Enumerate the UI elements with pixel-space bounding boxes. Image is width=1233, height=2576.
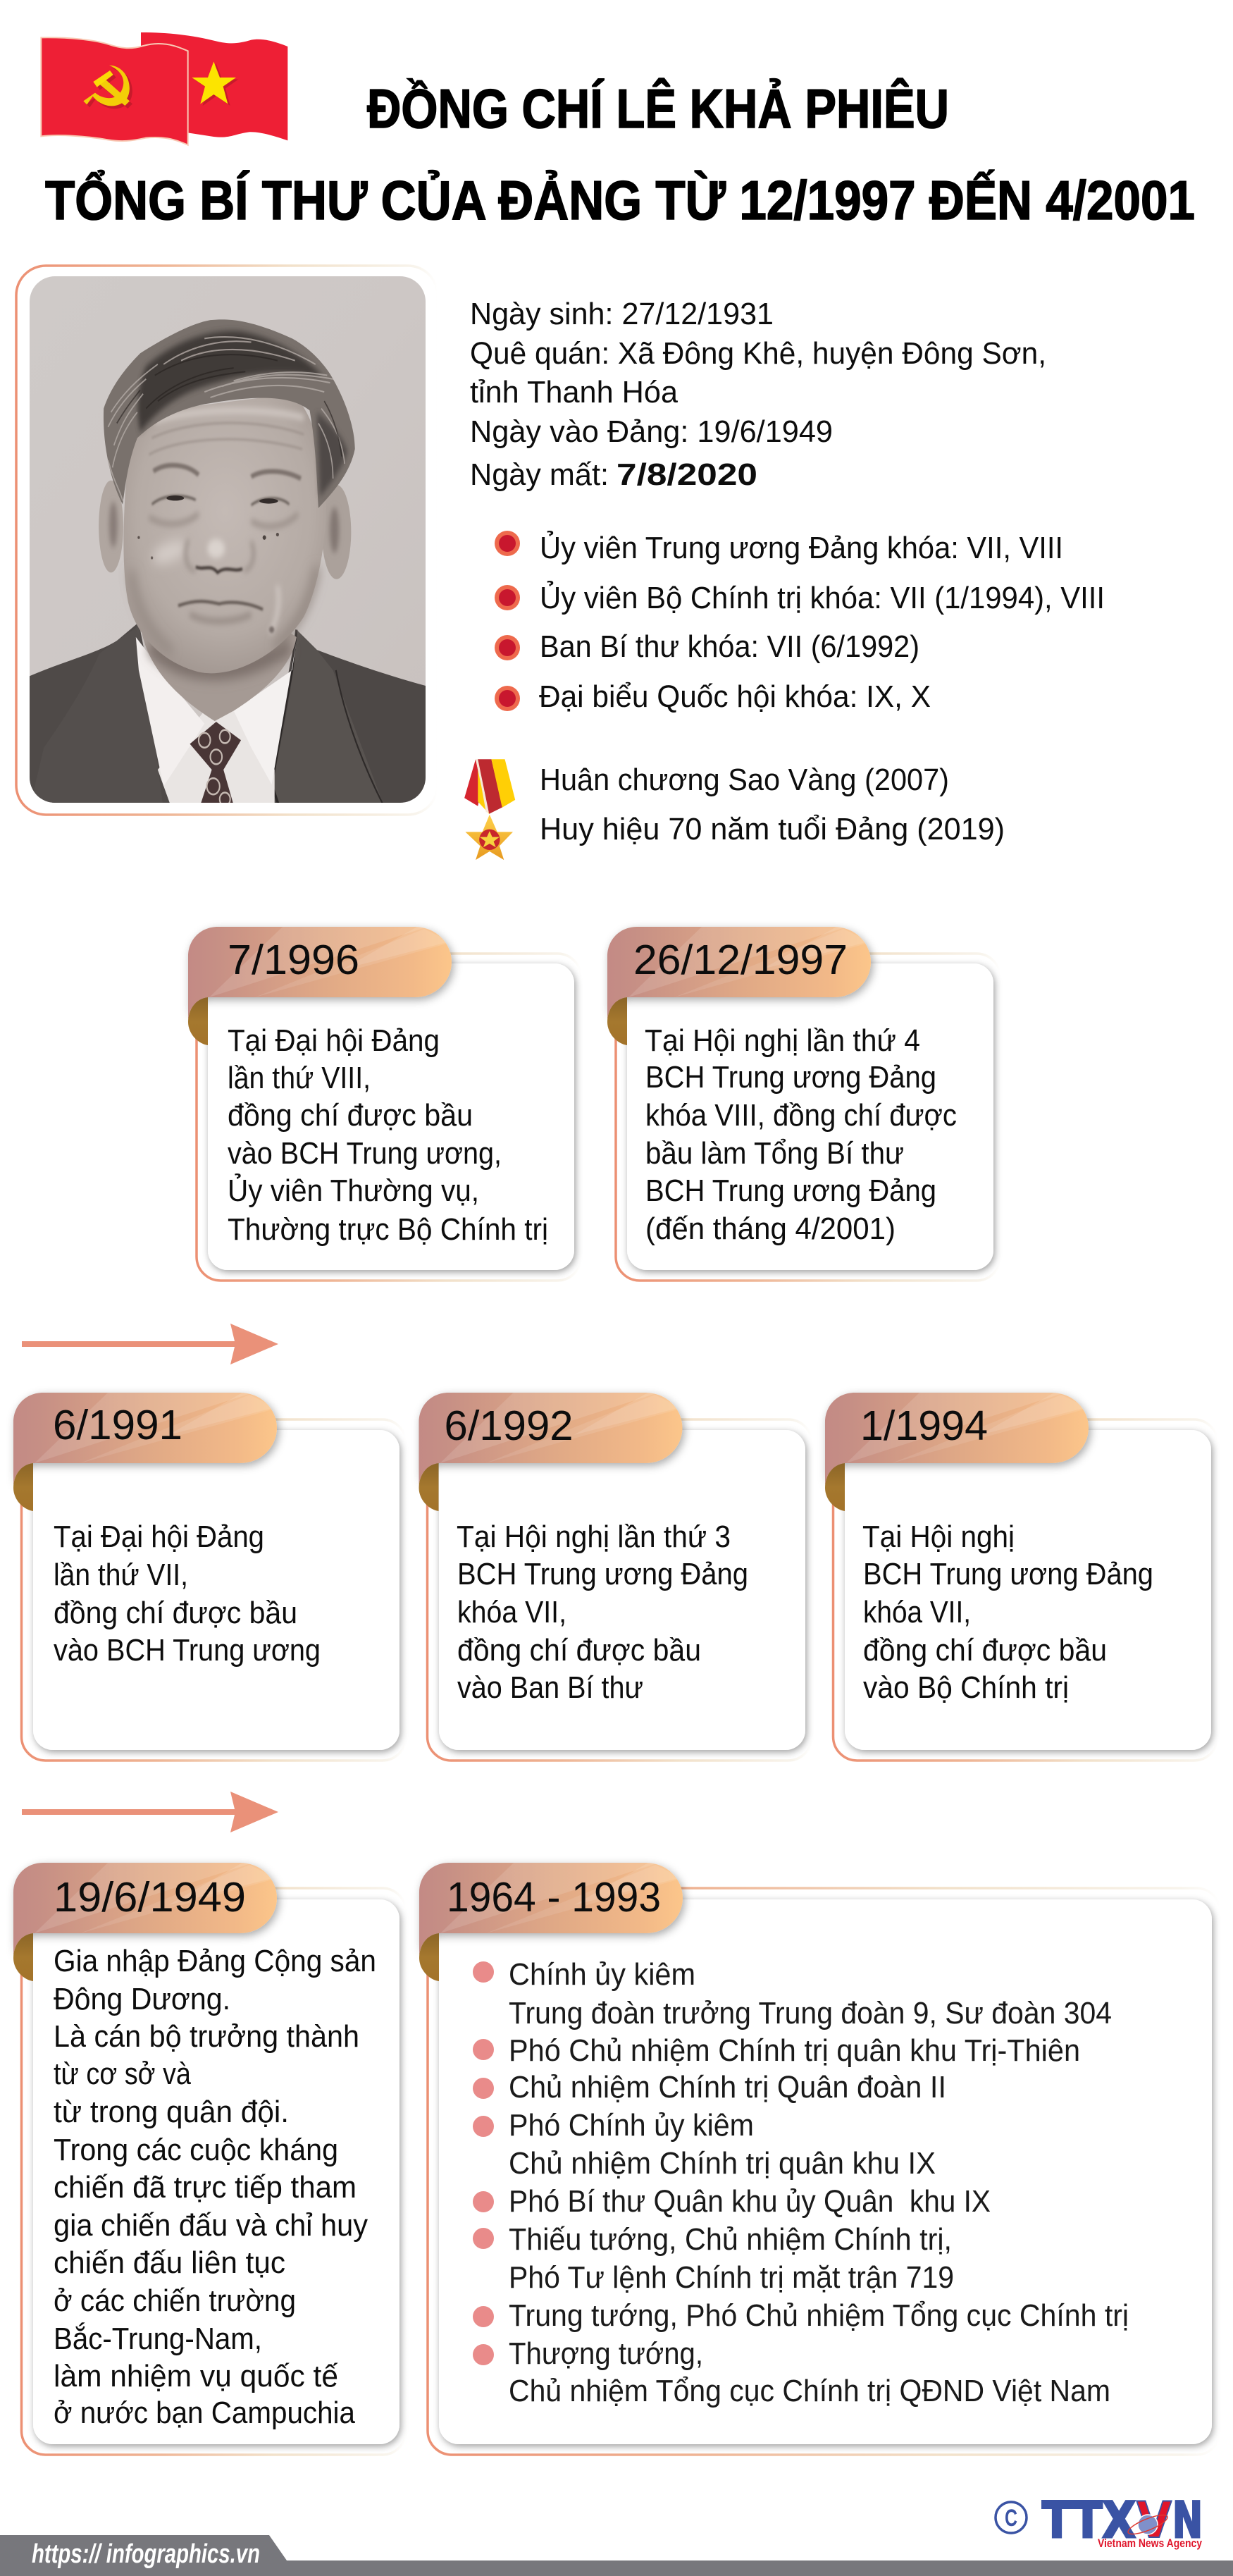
card frame	[197, 954, 581, 1281]
date ribbon: 6/1992	[444, 1403, 573, 1449]
date ribbon: 7/1996	[228, 937, 359, 983]
card text	[645, 1023, 957, 1246]
TTX letters: TTX	[1042, 2491, 1136, 2549]
panel: 1964 - 1993	[419, 1863, 1220, 2455]
bullet 2	[495, 585, 520, 610]
panel: 26/12/1997	[607, 927, 1000, 1281]
card body	[439, 1430, 805, 1750]
card body	[845, 1430, 1211, 1750]
card text: đồng chí được bầu	[54, 1596, 297, 1630]
card text: BCH Trung ương Đảng	[457, 1557, 748, 1591]
bullets	[473, 1961, 494, 2365]
card text	[54, 1520, 321, 1668]
date ribbon: 19/6/1949	[54, 1874, 246, 1921]
panel: portrait photo	[16, 266, 438, 815]
card text: Là cán bộ trưởng thành	[54, 2019, 359, 2054]
date ribbon	[13, 1393, 278, 1511]
list text	[509, 1957, 1129, 2408]
card frame	[427, 1419, 812, 1761]
text: party join date: Ngày vào Đảng: 19/6/1949	[470, 414, 833, 449]
card text: khóa VII,	[863, 1595, 971, 1629]
card body	[33, 1430, 399, 1750]
list text: Chính ủy kiêm	[509, 1957, 695, 1992]
list text: Thượng tướng,	[509, 2336, 703, 2371]
panel: 6/1991	[13, 1393, 406, 1761]
card frame	[21, 1888, 406, 2455]
panel: personal information	[470, 297, 1046, 492]
card text: vào Ban Bí thư	[457, 1670, 643, 1705]
date ribbon	[419, 1863, 683, 1981]
list text: Trung tướng, Phó Chủ nhiệm Tổng cục Chính trị	[509, 2298, 1129, 2333]
card text: bầu làm Tổng Bí thư	[645, 1136, 904, 1171]
card text	[862, 1520, 1153, 1705]
list text: Phó Chủ nhiệm Chính trị quân khu Trị-Thiên	[509, 2033, 1080, 2068]
panel: 7/1996	[188, 927, 581, 1281]
date ribbon	[13, 1863, 278, 1981]
award 1: Huân chương Sao Vàng (2007)	[540, 763, 949, 797]
title line 1: ĐỒNG CHÍ LÊ KHẢ PHIÊU	[367, 78, 949, 140]
card text: Ủy viên Thường vụ,	[228, 1172, 479, 1208]
card text: làm nhiệm vụ quốc tế	[54, 2359, 338, 2393]
face	[123, 394, 326, 673]
footer bar	[0, 2535, 1233, 2576]
date ribbon	[607, 927, 872, 1045]
N letter: N	[1172, 2491, 1203, 2549]
title	[45, 78, 1195, 231]
list text: Chủ nhiệm Chính trị quân khu IX	[509, 2146, 936, 2181]
card text: đồng chí được bầu	[228, 1098, 473, 1133]
card text: Bắc-Trung-Nam,	[54, 2322, 262, 2356]
date ribbon: 26/12/1997	[633, 937, 848, 983]
date ribbon: 6/1991	[53, 1402, 182, 1448]
list text: Thiếu tướng, Chủ nhiệm Chính trị,	[509, 2222, 952, 2257]
card text: Trong các cuộc kháng	[54, 2133, 338, 2167]
back flag with star	[141, 32, 287, 140]
card body	[208, 963, 574, 1270]
card text: lần thứ VII,	[54, 1558, 188, 1592]
card frame	[428, 1888, 1220, 2455]
item 4: Đại biểu Quốc hội khóa: IX, X	[539, 679, 931, 714]
neck	[142, 633, 297, 722]
tie	[190, 722, 241, 811]
arrow 1	[22, 1324, 278, 1364]
shirt	[158, 710, 275, 811]
card text: vào BCH Trung ương,	[228, 1136, 502, 1171]
card text: Gia nhập Đảng Cộng sản	[54, 1944, 376, 1978]
copyright mark: C	[1005, 2505, 1017, 2532]
list text: Phó Bí thư Quân khu ủy Quân khu IX	[509, 2184, 991, 2219]
card text: chiến đã trực tiếp tham	[54, 2170, 357, 2205]
card text: đồng chí được bầu	[863, 1633, 1107, 1668]
card text: lần thứ VIII,	[228, 1061, 371, 1095]
card frame	[21, 1419, 406, 1761]
photo frame	[16, 266, 438, 815]
bullet 3	[495, 635, 520, 660]
card text: vào BCH Trung ương	[54, 1633, 321, 1668]
card text: BCH Trung ương Đảng	[863, 1557, 1153, 1591]
card text: (đến tháng 4/2001)	[645, 1212, 896, 1246]
front flag with hammer and sickle	[41, 37, 188, 145]
card body	[627, 963, 993, 1270]
panel: 1/1994	[825, 1393, 1217, 1761]
card frame	[833, 1419, 1217, 1761]
globe	[1126, 2511, 1170, 2538]
card text: từ trong quân đội.	[54, 2095, 289, 2129]
card text: đồng chí được bầu	[457, 1633, 701, 1668]
card text	[457, 1520, 748, 1705]
list text: Trung đoàn trưởng Trung đoàn 9, Sư đoàn 304	[509, 1996, 1112, 2030]
card text: từ cơ sở và	[54, 2057, 191, 2091]
list text: Phó Chính ủy kiêm	[509, 2108, 754, 2143]
card text: ở các chiến trường	[54, 2284, 296, 2318]
card text: vào Bộ Chính trị	[863, 1670, 1069, 1705]
date ribbon	[419, 1393, 683, 1511]
date ribbon	[188, 927, 452, 1045]
list text: Chủ nhiệm Chính trị Quân đoàn II	[509, 2070, 946, 2104]
bullet 4	[495, 686, 520, 711]
copyright mark	[996, 2502, 1027, 2533]
text: death date label: Ngày mất:	[470, 457, 609, 492]
card text: Tại Đại hội Đảng	[54, 1520, 264, 1554]
list text: Chủ nhiệm Tổng cục Chính trị QĐND Việt Nam	[509, 2374, 1110, 2408]
date ribbon: 1/1994	[860, 1403, 988, 1449]
card text: gia chiến đấu và chỉ huy	[54, 2208, 368, 2243]
card text	[228, 1023, 548, 1247]
list: positions	[495, 529, 1105, 714]
list text: Phó Tư lệnh Chính trị mặt trận 719	[509, 2260, 954, 2295]
suit	[30, 624, 170, 803]
date ribbon	[825, 1393, 1089, 1511]
bullet 1	[495, 531, 520, 556]
V letter: V	[1136, 2491, 1172, 2549]
icon: party and national flags	[41, 32, 287, 145]
card text: chiến đấu liên tục	[54, 2245, 285, 2280]
facial features	[137, 410, 304, 634]
card text: ở nước bạn Campuchia	[54, 2396, 355, 2430]
card text: Thường trực Bộ Chính trị	[228, 1212, 548, 1247]
logo: TTXVN	[996, 2491, 1203, 2550]
panel: 19/6/1949	[13, 1863, 406, 2455]
card text: Tại Đại hội Đảng	[228, 1023, 440, 1058]
text: death date value: 7/8/2020	[616, 457, 757, 492]
agency name: Vietnam News Agency	[1098, 2537, 1202, 2550]
card frame	[616, 954, 1000, 1281]
panel: 6/1992	[419, 1393, 812, 1761]
card text: Tại Hội nghị lần thứ 3	[457, 1520, 731, 1554]
icon: medal	[464, 759, 515, 860]
card text: BCH Trung ương Đảng	[645, 1060, 936, 1095]
ears	[99, 481, 123, 572]
card text: Đông Dương.	[54, 1982, 230, 2016]
award 2: Huy hiệu 70 năm tuổi Đảng (2019)	[540, 812, 1005, 846]
text: hometown line 1: Quê quán: Xã Đông Khê, huyện Đông Sơn,	[470, 336, 1046, 371]
item 1: Ủy viên Trung ương Đảng khóa: VII, VIII	[540, 529, 1063, 565]
item 2: Ủy viên Bộ Chính trị khóa: VII (1/1994), VIII	[540, 579, 1105, 615]
card text: khóa VIII, đồng chí được	[645, 1098, 957, 1133]
card body	[33, 1899, 399, 2444]
card text	[54, 1944, 376, 2430]
footer url: https:// infographics.vn	[32, 2539, 260, 2569]
text: awards	[540, 763, 1005, 846]
date ribbon: 1964 - 1993	[447, 1874, 661, 1921]
item 3: Ban Bí thư khóa: VII (6/1992)	[540, 629, 919, 664]
hair	[104, 319, 355, 508]
card body	[439, 1899, 1212, 2444]
portrait	[26, 276, 429, 811]
text: hometown line 2: tỉnh Thanh Hóa	[470, 375, 679, 409]
card text: khóa VII,	[457, 1595, 566, 1629]
card text: Tại Hội nghị	[862, 1520, 1015, 1554]
arrow 2	[22, 1792, 278, 1832]
card text: BCH Trung ương Đảng	[645, 1173, 936, 1208]
text: birth date: Ngày sinh: 27/12/1931	[470, 297, 774, 331]
card text: Tại Hội nghị lần thứ 4	[645, 1023, 920, 1058]
